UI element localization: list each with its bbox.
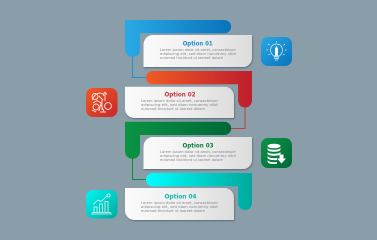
- text: option 03 body: euismod tincidunt ut laoreet dolore: [160, 157, 224, 162]
- ribbon: red: [146, 71, 252, 108]
- panel: option 03: [144, 137, 252, 169]
- text: option 02 body: [141, 98, 219, 111]
- text: option 02 body: euismod tincidunt ut laoreet dolore: [141, 106, 206, 111]
- text: option 03 body: [160, 149, 237, 162]
- heading: option 03: Option 03: [182, 143, 214, 150]
- heading: option 02: Option 02: [164, 92, 196, 99]
- heading: option 04: Option 04: [164, 194, 197, 201]
- icon: light bulb with pencil: [261, 37, 292, 66]
- ribbon: blue: [125, 20, 231, 57]
- ribbon: green: [125, 122, 231, 159]
- text: option 04 body: [141, 200, 219, 213]
- panel: option 04: [125, 188, 234, 220]
- heading: option 01: Option 01: [183, 41, 213, 48]
- connector: green to cyan: [132, 158, 148, 180]
- panel: option 01: [144, 35, 252, 67]
- connector: blue to red: [132, 56, 148, 78]
- text: option 03 body: Lorem ipsum dolor sit amet, consectetuer: [160, 149, 236, 154]
- text: option 02 body: adipiscing elit, sed diam nonummy nibh: [141, 102, 219, 107]
- text: option 03 body: adipiscing elit, sed diam nonummy nibh: [160, 153, 237, 158]
- ribbon: cyan: [146, 173, 252, 210]
- icon: money and hands: [86, 88, 118, 117]
- text: option 04 body: euismod tincidunt ut laoreet dolore: [141, 208, 206, 213]
- text: option 04 body: Lorem ipsum dolor sit amet, consectetuer: [141, 200, 218, 205]
- text: option 01 body: euismod tincidunt ut laoreet dolore: [160, 55, 224, 60]
- text: option 01 body: [160, 47, 237, 60]
- text: option 04 body: adipiscing elit, sed diam nonummy nibh: [141, 204, 219, 209]
- icon: growth bar chart: [86, 190, 118, 218]
- connector: red to green: [230, 107, 245, 128]
- text: option 01 body: Lorem ipsum dolor sit amet, consectetuer: [160, 47, 236, 52]
- text: option 01 body: adipiscing elit, sed diam nonummy nibh: [160, 51, 237, 56]
- panel: option 02: [125, 87, 234, 118]
- icon: database with download arrow: [261, 138, 292, 168]
- text: option 02 body: Lorem ipsum dolor sit amet, consectetuer: [141, 98, 218, 103]
